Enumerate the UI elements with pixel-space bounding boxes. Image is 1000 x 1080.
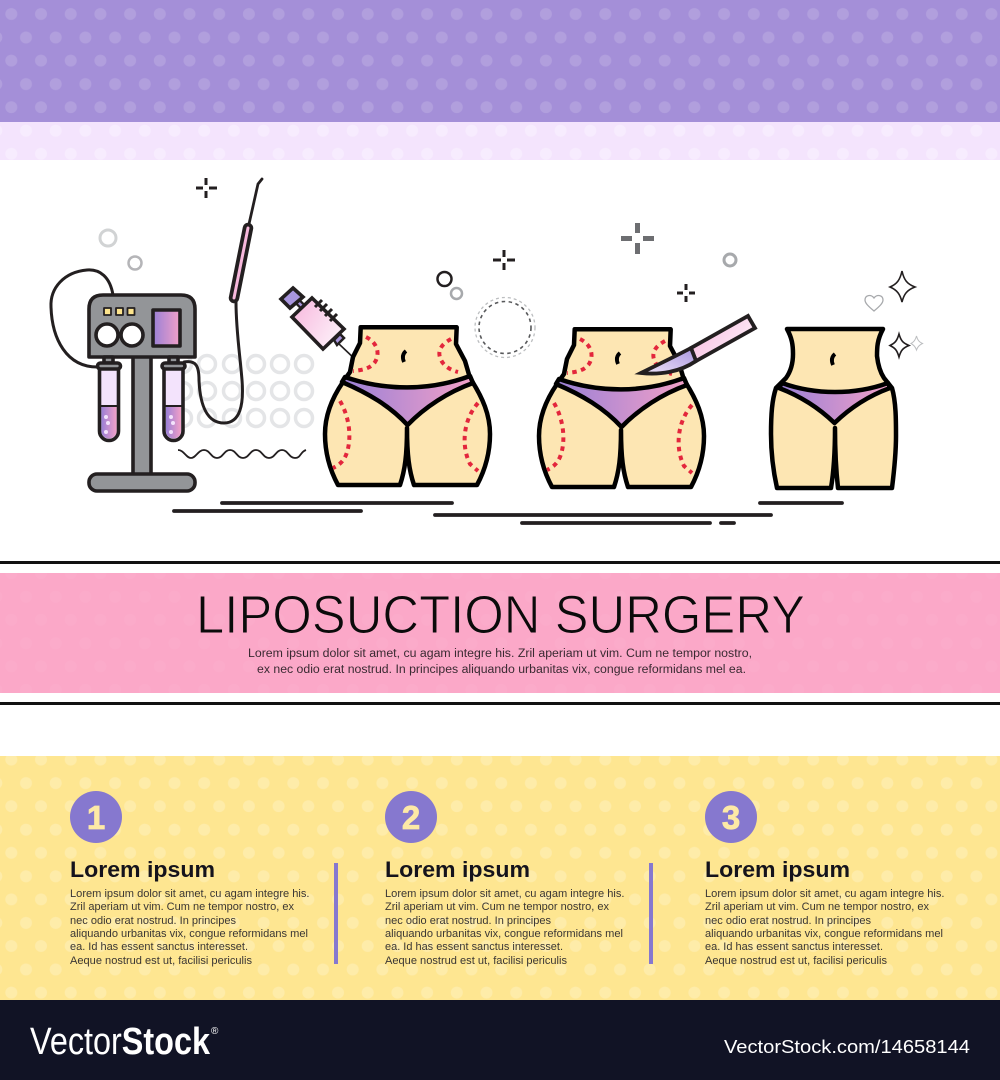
step 3 heading: Lorem ipsum [705,857,850,882]
top purple band [0,0,1000,122]
step 1 [70,791,310,967]
rule below banner [0,702,1000,705]
machine body [89,295,195,357]
registered mark: ® [211,1026,219,1037]
icon: syringe [281,288,358,362]
step 1 text [70,888,310,967]
icon: scalpel [641,316,755,374]
sparkle crosses [196,178,695,302]
step 2 text: ea. Id has essent sanctus interesset. [385,941,563,953]
number badge 3 [705,791,757,843]
divider 2 [649,863,653,964]
step 2 text [385,888,624,967]
number badge 1: 1 [87,799,105,836]
step 2 text: Lorem ipsum dolor sit amet, cu agam integre his. [385,888,624,900]
banner description: Lorem ipsum dolor sit amet, cu agam integre his. Zril aperiam ut vim. Cum ne tempor nostro, [248,648,752,660]
banner description [248,648,752,676]
number badge 2: 2 [402,799,420,836]
step 3 text: Aeque nostrud est ut, facilisi periculis [705,955,887,967]
ground lines [174,503,842,523]
number badge 2 [385,791,437,843]
footer url: VectorStock.com/14658144 [724,1036,970,1057]
dials [96,324,143,346]
icon: suction machine [51,270,242,491]
panel: yellow steps [0,756,1000,1000]
step 2 text: Zril aperiam ut vim. Cum ne tempor nostro, ex [385,901,609,913]
step 3 text: Zril aperiam ut vim. Cum ne tempor nostro, ex [705,901,929,913]
step 3 text: nec odio erat nostrud. In principes [705,915,871,927]
stand pole [133,355,151,475]
left test tube [98,357,120,440]
step 3 text: aliquando urbanitas vix, congue reformidans mel [705,928,943,940]
heart and star sparkles [865,271,922,357]
indicator lights [104,308,134,315]
step 2 heading: Lorem ipsum [385,857,530,882]
title: LIPOSUCTION SURGERY [196,585,805,645]
illustration: decorative ring grid [174,356,312,426]
number badge 3: 3 [722,799,740,836]
step 3 text: Lorem ipsum dolor sit amet, cu agam integre his. [705,888,944,900]
right test tube [162,357,185,440]
icon: suction cannula [234,179,262,298]
panel: footer [0,1000,1000,1080]
step 2 [385,791,624,967]
step 3 text [705,888,944,967]
light lilac band [0,122,1000,160]
machine cables [51,270,242,423]
step 3 [705,791,944,967]
body after: slim waist and hips [771,329,896,488]
screen [153,310,180,346]
step 1 text: aliquando urbanitas vix, congue reformidans mel [70,928,308,940]
step 1 text: nec odio erat nostrud. In principes [70,915,236,927]
rule above banner [0,561,1000,564]
stand base [89,474,195,491]
step 1 text: Zril aperiam ut vim. Cum ne tempor nostro, ex [70,901,294,913]
step 1 text: Lorem ipsum dolor sit amet, cu agam integre his. [70,888,310,900]
step 3 text: ea. Id has essent sanctus interesset. [705,941,883,953]
step 2 text: aliquando urbanitas vix, congue reformidans mel [385,928,623,940]
step 1 heading: Lorem ipsum [70,857,215,882]
step 1 text: Aeque nostrud est ut, facilisi periculis [70,955,252,967]
number badge 1 [70,791,122,843]
banner description: ex nec odio erat nostrud. In principes aliquando urbanitas vix, congue reformidans mel ea. [257,664,746,676]
step 2 text: nec odio erat nostrud. In principes [385,915,551,927]
panel: pink title banner [0,573,1000,693]
step 2 text: Aeque nostrud est ut, facilisi periculis [385,955,567,967]
wavy line [178,450,306,458]
step 1 text: ea. Id has essent sanctus interesset. [70,941,248,953]
body during: marked hips with scalpel [539,329,704,487]
body before: marked hips with syringe [325,327,490,485]
divider 1 [334,863,338,964]
footer logo: VectorStock [30,1021,211,1063]
decorative rings [100,230,736,358]
